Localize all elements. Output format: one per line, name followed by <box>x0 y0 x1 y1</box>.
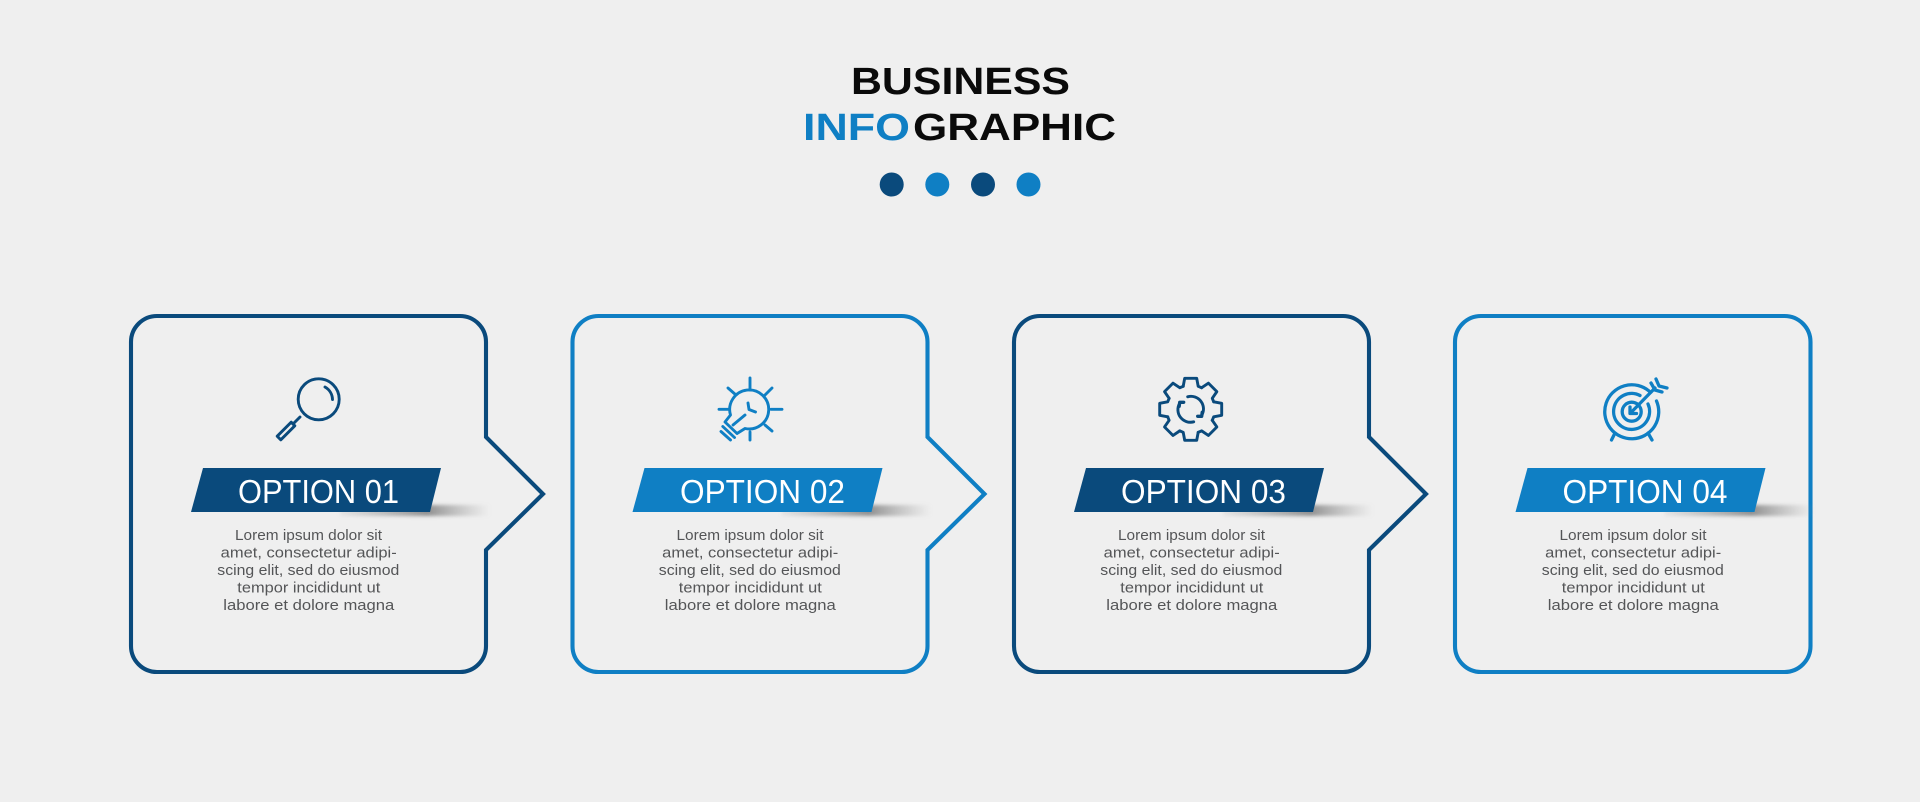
description: tempor incididunt ut <box>237 580 381 596</box>
ribbon shadow <box>782 505 932 516</box>
dots <box>880 172 1040 196</box>
description: scing elit, sed do eiusmod <box>659 562 841 579</box>
title line: graphic: GRAPHIC <box>913 107 1116 149</box>
ribbon label: OPTION 04 <box>1562 473 1728 510</box>
ribbon <box>191 468 441 512</box>
description: Lorem ipsum dolor sit <box>235 527 383 544</box>
description: scing elit, sed do eiusmod <box>217 562 399 579</box>
ribbon label: OPTION 02 <box>680 473 845 510</box>
panel: option 04 <box>1455 316 1814 672</box>
ribbon <box>632 468 882 512</box>
card outline <box>131 316 543 672</box>
title <box>803 61 1116 149</box>
title line: business: BUSINESS <box>851 61 1070 103</box>
icon: gear with cycle arrows <box>1160 378 1222 440</box>
description: amet, consectetur adipi- <box>1104 544 1280 562</box>
icon: lightbulb with clock <box>719 378 782 440</box>
description: amet, consectetur adipi- <box>1545 544 1721 562</box>
panel: option 03 <box>1014 316 1426 672</box>
description: labore et dolore magna <box>1548 597 1720 614</box>
description: tempor incididunt ut <box>1562 580 1706 596</box>
description: tempor incididunt ut <box>1120 580 1264 596</box>
description: amet, consectetur adipi- <box>221 544 397 562</box>
icon: magnifier <box>277 379 339 440</box>
description: Lorem ipsum dolor sit <box>676 527 824 544</box>
panel: option 02 <box>572 316 984 672</box>
ribbon shadow <box>1664 505 1814 516</box>
description: Lorem ipsum dolor sit <box>1118 527 1266 544</box>
description: scing elit, sed do eiusmod <box>1542 562 1724 579</box>
description: labore et dolore magna <box>1106 597 1278 614</box>
description: labore et dolore magna <box>223 597 395 614</box>
card outline <box>572 316 984 672</box>
description: scing elit, sed do eiusmod <box>1100 562 1282 579</box>
ribbon shadow <box>1223 505 1373 516</box>
ribbon label: OPTION 03 <box>1121 473 1286 510</box>
description <box>217 527 399 614</box>
ribbon label: OPTION 01 <box>238 473 399 510</box>
description: Lorem ipsum dolor sit <box>1560 527 1707 544</box>
ribbon <box>1074 468 1324 512</box>
description: labore et dolore magna <box>665 597 837 614</box>
title line: info: INFO <box>803 107 910 149</box>
panel: option 01 <box>131 316 543 672</box>
description <box>659 527 841 614</box>
description <box>1100 527 1282 614</box>
description: amet, consectetur adipi- <box>662 544 838 562</box>
ribbon <box>1516 468 1766 512</box>
ribbon shadow <box>340 505 490 516</box>
description <box>1542 527 1724 614</box>
description: tempor incididunt ut <box>679 580 823 596</box>
card outline <box>1014 316 1426 672</box>
card outline <box>1455 316 1810 672</box>
icon: target with arrow <box>1605 379 1667 440</box>
